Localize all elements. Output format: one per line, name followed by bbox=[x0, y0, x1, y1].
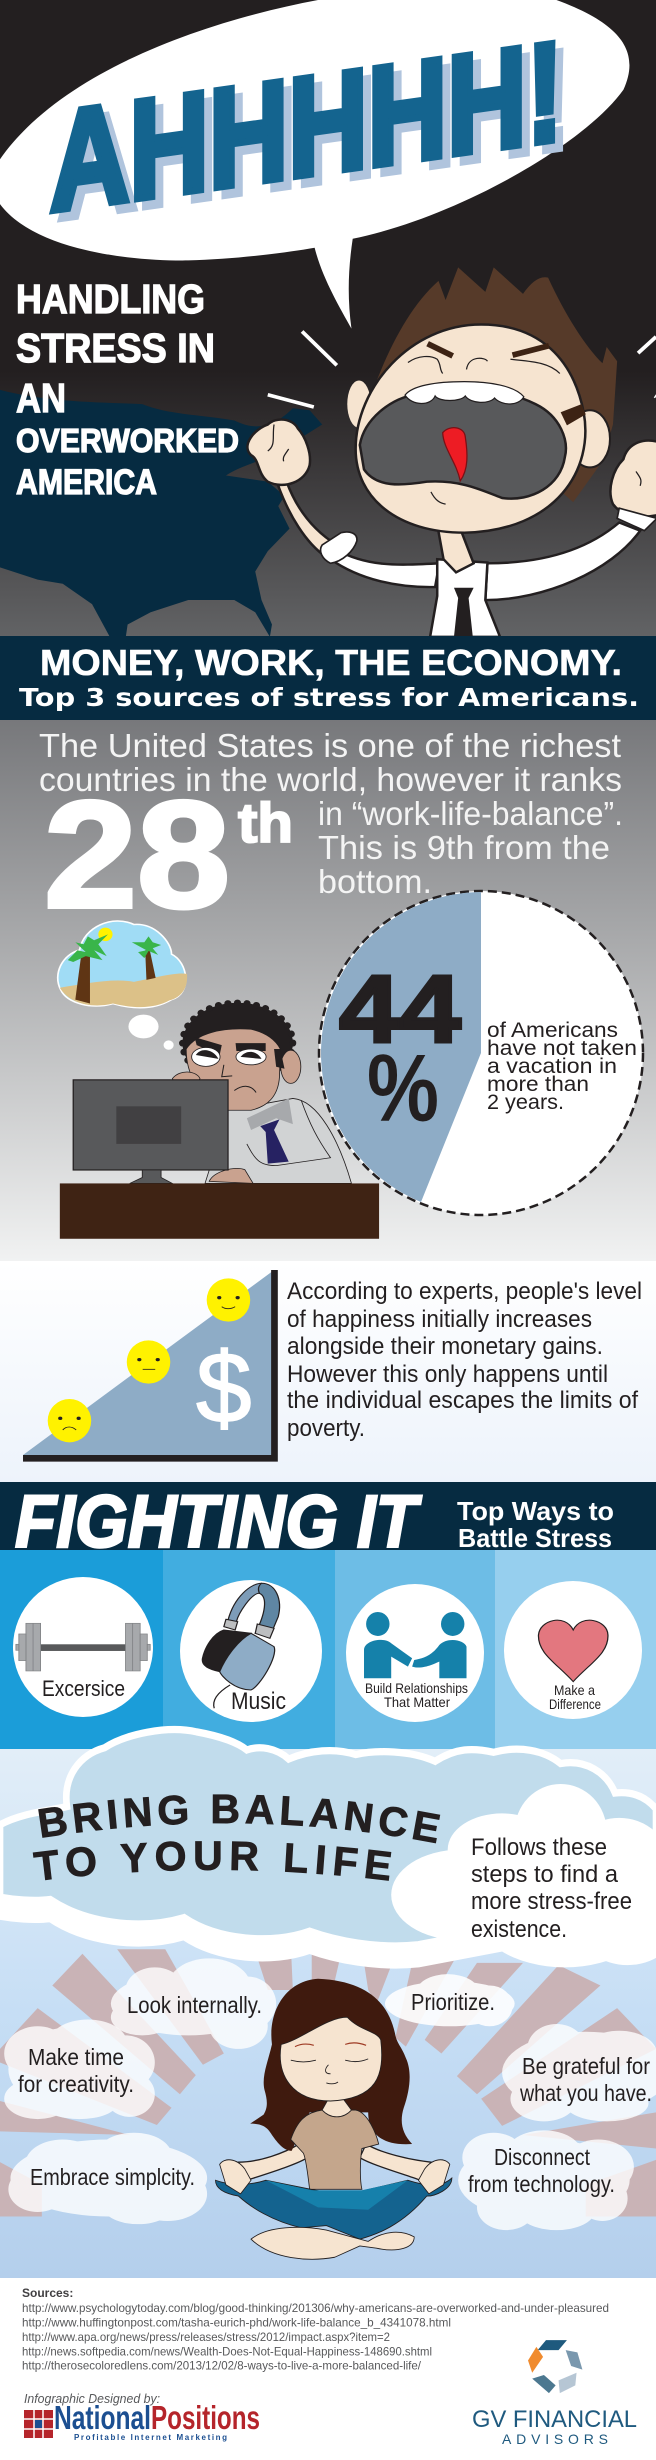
speech bubble bbox=[0, 0, 629, 329]
text: happiness explanation: However this only happens until bbox=[287, 1361, 608, 1388]
item: music bbox=[180, 1580, 322, 1722]
text: intro to steps bbox=[471, 1834, 632, 1943]
logo: National Positions: National bbox=[54, 2399, 151, 2436]
logo: National Positions: Positions bbox=[151, 2399, 260, 2436]
icon: dollar sign: $ bbox=[196, 1332, 252, 1444]
text: happiness explanation: of happiness initially increases bbox=[287, 1306, 592, 1333]
thought cloud: make time bbox=[4, 2019, 155, 2119]
text: balance steps: Disconnect bbox=[494, 2144, 591, 2170]
title: AMERICA bbox=[16, 463, 157, 502]
text: balance steps: Look internally. bbox=[127, 1992, 262, 2018]
stat: 28th: 28 bbox=[44, 770, 230, 940]
item: make a difference: Difference bbox=[549, 1696, 601, 1712]
text: balance steps: from technology. bbox=[468, 2171, 615, 2197]
text: balance steps bbox=[18, 1989, 652, 2197]
thought cloud: be grateful bbox=[502, 2024, 656, 2121]
text: balance steps: Prioritize. bbox=[411, 1989, 495, 2015]
panel: bring balance bbox=[0, 1726, 656, 2278]
sources: http://news.softpedia.com/news/Wealth-Does-Not-Equal-Happiness-148690.shtml bbox=[22, 2344, 432, 2358]
title: STRESS IN bbox=[16, 325, 215, 371]
title: HANDLING bbox=[16, 276, 205, 322]
banner: top stress sources: Top 3 sources of stress for Americans. bbox=[19, 683, 639, 712]
text: intro to steps: existence. bbox=[471, 1916, 567, 1943]
item: make a difference bbox=[504, 1581, 642, 1719]
thought cloud: look internally bbox=[111, 1958, 276, 2049]
heading: bring balance: BRING BALANCE bbox=[38, 1794, 440, 1844]
heading: bring balance bbox=[32, 1794, 440, 1881]
stat: 28th: th bbox=[238, 791, 293, 854]
pie chart: 44 percent: of Americans bbox=[487, 1019, 618, 1042]
logo: GV Financial Advisors bbox=[472, 2340, 637, 2447]
intro text bbox=[39, 727, 623, 900]
icon: heart bbox=[538, 1620, 608, 1682]
panel: footer bbox=[0, 2278, 656, 2460]
intro text: This is 9th from the bbox=[318, 829, 610, 866]
sources: http://www.psychologytoday.com/blog/good-thinking/201306/why-americans-are-overworked-and-under-pleasured bbox=[22, 2301, 609, 2315]
text: happiness explanation: According to experts, people's level bbox=[287, 1278, 642, 1305]
item: relationships: That Matter bbox=[384, 1694, 450, 1710]
item: make a difference: Make a bbox=[554, 1682, 595, 1698]
stat: 28th bbox=[44, 770, 293, 940]
sources bbox=[22, 2286, 609, 2372]
item: relationships bbox=[346, 1584, 484, 1722]
illustration: screaming man bbox=[247, 267, 656, 637]
computer monitor bbox=[73, 1080, 228, 1183]
logo: National Positions bbox=[24, 2399, 260, 2442]
text: happiness explanation: poverty. bbox=[287, 1415, 365, 1442]
logo: GV Financial Advisors: GV FINANCIAL bbox=[472, 2406, 637, 2433]
sources: http://www.apa.org/news/press/releases/stress/2012/impact.aspx?item=2 bbox=[22, 2330, 390, 2344]
text: intro to steps: Follows these bbox=[471, 1834, 607, 1861]
item: music: Music bbox=[231, 1688, 286, 1715]
pie chart: 44 percent: 2 years. bbox=[487, 1091, 564, 1114]
pie chart: 44 percent bbox=[319, 891, 643, 1215]
banner: fighting it: Top Ways to bbox=[457, 1496, 614, 1526]
thought cloud: prioritize bbox=[385, 1974, 515, 2026]
thought cloud: disconnect bbox=[458, 2130, 634, 2230]
panel: money and happiness bbox=[0, 1261, 656, 1482]
heading: bring balance: TO YOUR LIFE bbox=[32, 1841, 392, 1881]
icon: barbell bbox=[16, 1623, 150, 1671]
icon: handshake bbox=[364, 1612, 467, 1678]
designer credit: Infographic Designed by: bbox=[24, 2391, 160, 2406]
pie chart: 44 percent: have not taken bbox=[487, 1037, 637, 1060]
intro text: countries in the world, however it ranks bbox=[39, 761, 622, 798]
item: exercise bbox=[13, 1577, 153, 1717]
intro text: The United States is one of the richest bbox=[39, 727, 621, 764]
text: happiness explanation: the individual escapes the limits of bbox=[287, 1387, 638, 1414]
intro text: bottom. bbox=[318, 863, 432, 900]
banner: fighting it: Battle Stress bbox=[458, 1523, 612, 1553]
headline AHHHHH!: AHHHHH! bbox=[50, 11, 563, 241]
illustration: meditating woman bbox=[215, 1979, 452, 2259]
desk bbox=[60, 1183, 379, 1239]
item: exercise: Excersice bbox=[42, 1676, 125, 1701]
pie chart: 44 percent: a vacation in bbox=[487, 1055, 617, 1078]
pie chart: 44 percent: % bbox=[367, 1035, 439, 1142]
headline AHHHHH!: AHHHHH! bbox=[58, 19, 571, 249]
sources: Sources: bbox=[22, 2286, 73, 2300]
text: balance steps: Make time bbox=[28, 2044, 124, 2070]
big cloud bbox=[0, 1730, 656, 1967]
white cloud bbox=[391, 1784, 656, 1967]
icon: headphones bbox=[202, 1583, 280, 1708]
map of the United States bbox=[0, 390, 322, 639]
pie chart: 44 percent: 44 bbox=[339, 956, 461, 1063]
text: balance steps: Embrace simplcity. bbox=[30, 2164, 195, 2190]
title bbox=[16, 276, 239, 502]
designer credit bbox=[24, 2391, 260, 2442]
sun rays bbox=[0, 1945, 656, 2216]
banner: top stress sources: MONEY, WORK, THE ECONOMY. bbox=[40, 642, 622, 683]
icon: happy face bbox=[207, 1278, 250, 1322]
text: happiness explanation bbox=[287, 1278, 642, 1442]
illustration: worker daydreaming at desk bbox=[58, 921, 379, 1239]
chart: happiness ramp bbox=[23, 1270, 278, 1462]
banner: fighting it bbox=[0, 1480, 656, 1563]
text: balance steps: for creativity. bbox=[18, 2071, 134, 2097]
text: happiness explanation: alongside their monetary gains. bbox=[287, 1333, 603, 1360]
logo: National Positions: Profitable Internet Marketing bbox=[74, 2433, 227, 2442]
icon: neutral face bbox=[127, 1340, 170, 1384]
banner: top stress sources bbox=[0, 636, 656, 720]
thought cloud bbox=[58, 921, 187, 1050]
panel: hero bbox=[0, 0, 656, 640]
logo: GV Financial Advisors: ADVISORS bbox=[502, 2431, 608, 2447]
icon: sad face bbox=[48, 1399, 91, 1442]
panel: ways to battle stress bbox=[0, 1550, 656, 1750]
sources: http://therosecoloredlens.com/2013/12/02/8-ways-to-live-a-more-balanced-life/ bbox=[22, 2358, 422, 2372]
banner: fighting it: FIGHTING IT bbox=[15, 1480, 422, 1563]
thought cloud: embrace simplicity bbox=[8, 2133, 207, 2224]
item: relationships: Build Relationships bbox=[365, 1680, 468, 1696]
text: intro to steps: steps to find a bbox=[471, 1861, 619, 1888]
text: intro to steps: more stress-free bbox=[471, 1888, 632, 1915]
pie chart: 44 percent: more than bbox=[487, 1073, 589, 1096]
title: OVERWORKED bbox=[16, 422, 239, 459]
sources: http://www.huffingtonpost.com/tasha-eurich-phd/work-life-balance_b_4341078.html bbox=[22, 2316, 451, 2330]
intro text: in “work-life-balance”. bbox=[318, 795, 623, 832]
title: AN bbox=[16, 375, 66, 421]
panel: work-life balance bbox=[0, 720, 656, 1261]
worker bbox=[172, 1003, 351, 1183]
